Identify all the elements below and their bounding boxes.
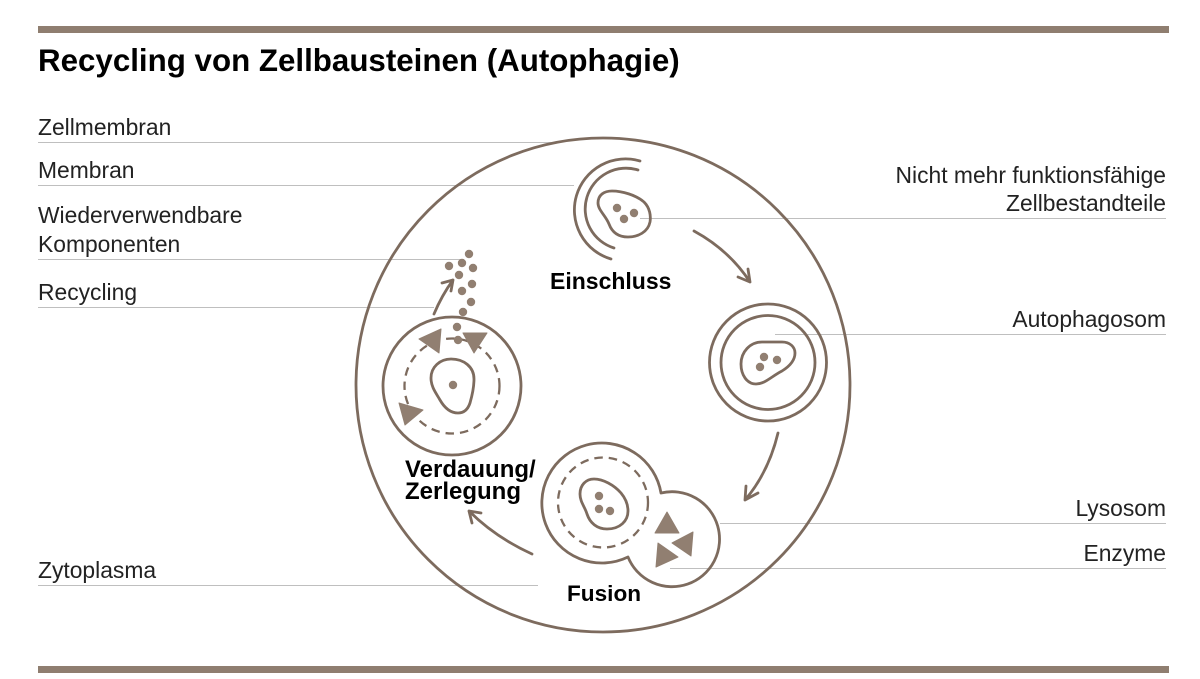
arrow: Fusion to Verdauung xyxy=(469,511,532,554)
cell outer circle xyxy=(356,138,850,632)
top bar xyxy=(38,26,1169,33)
label: Zellmembran: Zellmembran xyxy=(38,114,171,140)
label: Zytoplasma: Zytoplasma xyxy=(38,557,156,583)
label: Recycling: Recycling xyxy=(38,279,137,305)
stage: Autophagosom xyxy=(710,304,826,421)
bottom bar xyxy=(38,666,1169,673)
reusable components dots xyxy=(445,250,477,344)
stage: Fusion xyxy=(542,443,720,587)
stage: Einschluss xyxy=(574,159,650,259)
heading: Verdauung/Zerlegung: Verdauung/ xyxy=(405,456,536,483)
label: Membran: Membran xyxy=(38,157,134,183)
leader lines xyxy=(38,142,1166,586)
heading: Einschluss: Einschluss xyxy=(550,268,671,294)
label: Autophagosom: Autophagosom xyxy=(1012,306,1166,332)
label: Lysosom: Lysosom xyxy=(1075,495,1166,521)
heading: Verdauung/Zerlegung: Zerlegung xyxy=(405,478,521,505)
arrow: recycling xyxy=(434,280,453,314)
stage: Verdauung/Zerlegung xyxy=(383,317,521,455)
label: Nicht mehr funktionsfähige Zellbestandteile: Nicht mehr funktionsfähige xyxy=(896,162,1166,188)
arrow: Autophagosom to Fusion xyxy=(745,433,778,500)
label: Wiederverwendbare Komponenten: Wiederverwendbare xyxy=(38,202,242,228)
heading: Fusion: Fusion xyxy=(567,581,641,606)
arrow: Einschluss to Autophagosom xyxy=(694,231,750,282)
label: Enzyme: Enzyme xyxy=(1083,540,1166,566)
label: Nicht mehr funktionsfähige Zellbestandteile: Zellbestandteile xyxy=(1006,190,1166,216)
title: Recycling von Zellbausteinen (Autophagie) xyxy=(38,43,680,78)
label: Wiederverwendbare Komponenten: Komponenten xyxy=(38,231,180,257)
